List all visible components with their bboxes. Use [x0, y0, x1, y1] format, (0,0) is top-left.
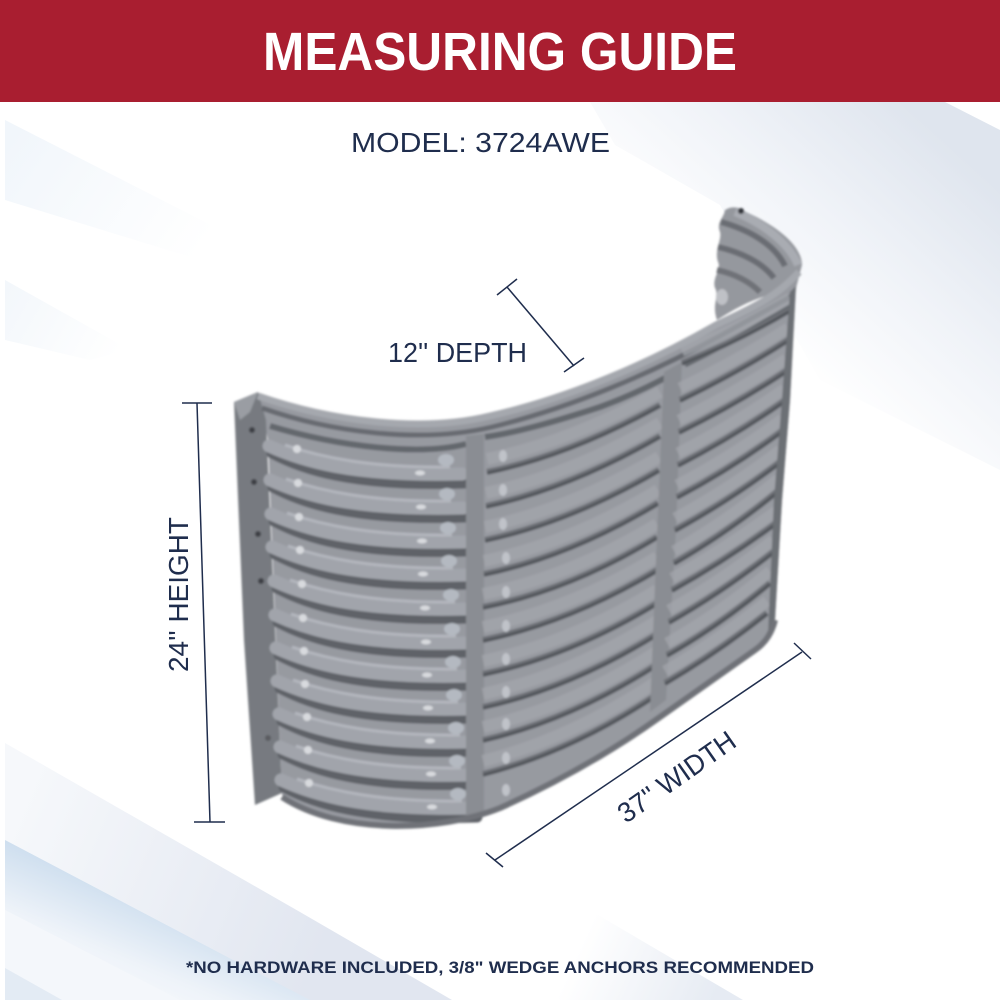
- right panel ribs: [665, 298, 790, 684]
- left panel ribs: [269, 445, 477, 818]
- top rim: [258, 272, 799, 449]
- right edge shadow: [768, 286, 796, 636]
- back inner end: [714, 207, 802, 320]
- title: MEASURING GUIDE: [263, 22, 737, 82]
- vertical seam left: [466, 434, 484, 818]
- depth label: 12'' DEPTH: [388, 337, 527, 368]
- middle panel ribs: [483, 392, 660, 775]
- vertical seam right: [650, 362, 682, 712]
- window well product: [234, 207, 802, 826]
- model label: MODEL: 3724AWE: [351, 127, 610, 158]
- header banner: [0, 0, 1000, 102]
- depth dimension: [497, 279, 584, 372]
- width dimension: [486, 643, 811, 867]
- body: [258, 284, 796, 826]
- width label: 37'' WIDTH: [612, 725, 742, 829]
- middle panel highlights: [499, 450, 510, 796]
- height label: 24'' HEIGHT: [163, 517, 194, 672]
- left flange: [234, 392, 282, 805]
- footnote: *NO HARDWARE INCLUDED, 3/8" WEDGE ANCHORS RECOMMENDED: [186, 958, 814, 977]
- bottom edge: [282, 620, 775, 826]
- height dimension: [182, 403, 225, 822]
